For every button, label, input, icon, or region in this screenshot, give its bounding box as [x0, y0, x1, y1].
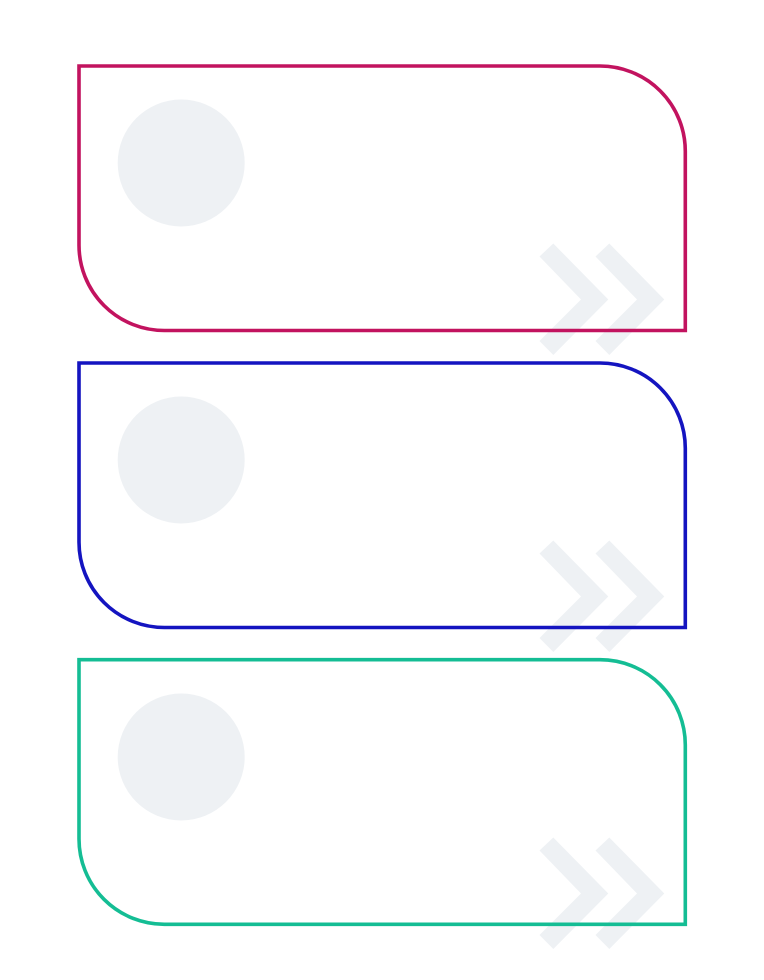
- icon: placeholder circle: [118, 694, 245, 820]
- icon: placeholder circle: [118, 100, 245, 226]
- frame: magenta outline: [79, 66, 685, 330]
- arrow: double chevron: [540, 540, 664, 652]
- arrow: double chevron: [540, 838, 664, 949]
- panel: green: [79, 660, 685, 949]
- frame: green outline: [79, 660, 685, 924]
- panel: blue: [79, 363, 685, 652]
- arrow: double chevron: [540, 244, 664, 355]
- icon: placeholder circle: [118, 396, 245, 524]
- frame: blue outline: [79, 363, 685, 628]
- panel: magenta: [79, 66, 685, 355]
